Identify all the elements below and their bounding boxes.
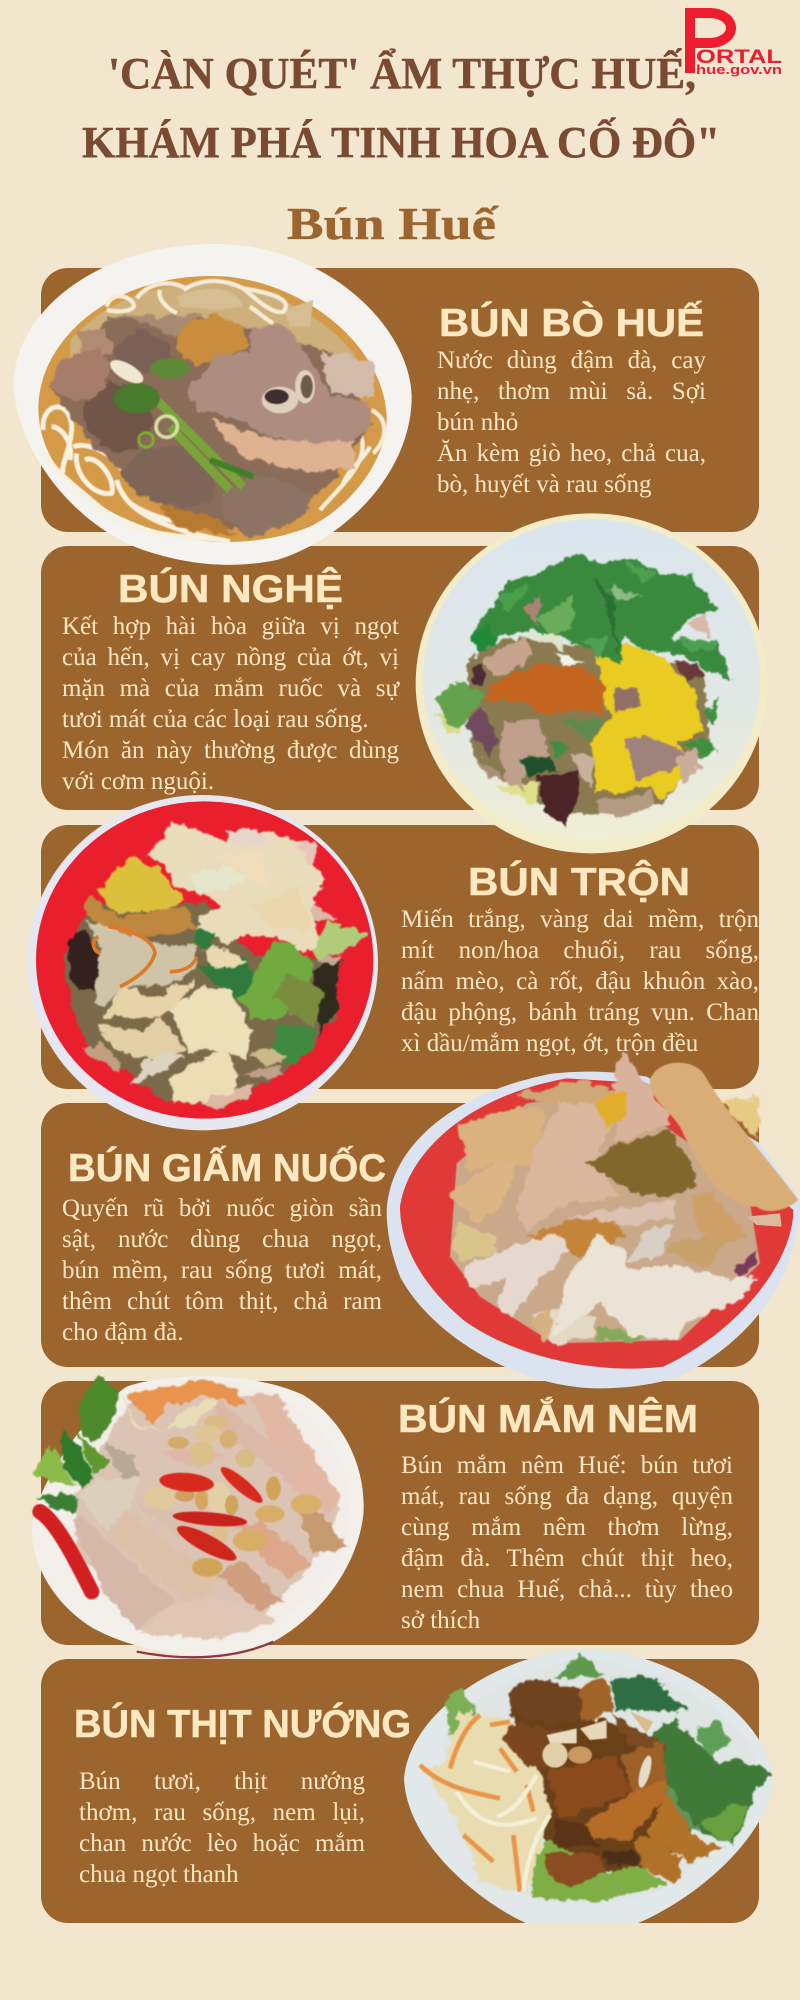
description: Bún trộn: xì dầu/mắm ngọt, ớt, trộn đều [401, 1030, 698, 1057]
description: Bún bò Huế [437, 347, 706, 498]
icon: bowl of bún trộn [27, 795, 378, 1130]
description: Bún mắm nêm: mát, rau sống đa dạng, quyện [401, 1483, 733, 1510]
description: Bún mắm nêm: cùng mắm nêm thơm lừng, [401, 1514, 733, 1541]
description: Bún trộn: mít non/hoa chuối, rau sống, [401, 937, 759, 964]
description: Bún giấm nuốc: bún mềm, rau sống tươi mát, [62, 1257, 382, 1284]
description: Bún bò Huế: nhẹ, thơm mùi sả. Sợi [437, 378, 706, 405]
icon: bowl of bún thịt nướng [404, 1649, 774, 1923]
subtitle: Bún Huế: Bún Huế [287, 198, 499, 249]
description: Bún giấm nuốc [62, 1195, 382, 1346]
panel: Bún giấm nuốc [41, 1103, 759, 1367]
heading: Bún trộn: BÚN TRỘN [468, 859, 690, 904]
description: Bún bò Huế: Nước dùng đậm đà, cay [437, 347, 706, 374]
description: Bún mắm nêm: đậm đà. Thêm chút thịt heo, [401, 1545, 733, 1572]
description: Bún nghệ: với cơm nguội. [62, 768, 214, 795]
description: Bún mắm nêm: sở thích [401, 1607, 480, 1634]
description: Bún nghệ [62, 613, 400, 795]
title: 'CÀN QUÉT' ẨM THỰC HUẾ, [108, 47, 696, 98]
description: Bún giấm nuốc: Quyến rũ bởi nuốc giòn sần [62, 1195, 382, 1222]
description: Bún trộn: đậu phộng, bánh tráng vụn. Chan [401, 999, 759, 1026]
panel: Bún trộn [41, 825, 759, 1089]
title [82, 47, 720, 167]
description: Bún thịt nướng [79, 1768, 365, 1888]
description: Bún nghệ: mặn mà của mắm ruốc và sự [62, 675, 399, 702]
panel: Bún nghệ [41, 546, 759, 810]
icon: bowl of bún nghệ [416, 513, 760, 854]
description: Bún nghệ: của hến, vị cay nồng của ớt, vị [62, 644, 399, 671]
title: KHÁM PHÁ TINH HOA CỐ ĐÔ" [82, 117, 720, 167]
panel: Bún bò Huế [41, 268, 759, 532]
description: Bún trộn: nấm mèo, cà rốt, đậu khuôn xào, [401, 968, 759, 995]
description: Bún nghệ: tươi mát của các loại rau sống. [62, 706, 369, 733]
description: Bún mắm nêm: nem chua Huế, chả... tùy theo [401, 1576, 733, 1603]
heading: Bún nghệ: BÚN NGHỆ [118, 567, 343, 611]
description: Bún thịt nướng: chua ngọt thanh [79, 1861, 239, 1888]
description: Bún nghệ: Kết hợp hài hòa giữa vị ngọt [62, 613, 399, 640]
description: Bún bò Huế: Ăn kèm giò heo, chả cua, [437, 440, 706, 467]
description: Bún mắm nêm [401, 1452, 733, 1634]
heading: Bún bò Huế: BÚN BÒ HUẾ [439, 301, 704, 345]
panel: Bún thịt nướng [41, 1659, 759, 1923]
heading: Bún giấm nuốc: BÚN GIẤM NUỐC [68, 1145, 386, 1190]
description: Bún trộn: Miến trắng, vàng dai mềm, trộn [401, 906, 759, 933]
description: Bún thịt nướng: chan nước lèo hoặc mắm [79, 1830, 365, 1857]
logo: Portal hue.gov.vn: hue.gov.vn [696, 62, 782, 77]
icon: bowl of bún giấm nuốc [386, 1050, 800, 1388]
description: Bún thịt nướng: thơm, rau sống, nem lụi, [79, 1799, 365, 1826]
heading: Bún thịt nướng: BÚN THỊT NƯỚNG [74, 1702, 411, 1746]
description: Bún giấm nuốc: sật, nước dùng chua ngọt, [62, 1226, 382, 1253]
description: Bún giấm nuốc: thêm chút tôm thịt, chả ram [62, 1288, 382, 1315]
description: Bún bò Huế: bún nhỏ [437, 409, 518, 436]
logo: Portal hue.gov.vn: ORTAL [696, 47, 783, 68]
description: Bún giấm nuốc: cho đậm đà. [62, 1319, 183, 1346]
icon: bowl of bún bò Huế [13, 244, 750, 850]
description: Bún nghệ: Món ăn này thường được dùng [62, 737, 399, 764]
logo: Portal hue.gov.vn [685, 8, 783, 77]
description: Bún thịt nướng: Bún tươi, thịt nướng [79, 1768, 365, 1795]
panel: Bún mắm nêm [41, 1381, 759, 1645]
description: Bún trộn [401, 906, 759, 1057]
description: Bún mắm nêm: Bún mắm nêm Huế: bún tươi [401, 1452, 733, 1479]
icon: bowl of bún mắm nêm [32, 1374, 364, 1658]
heading: Bún mắm nêm: BÚN MẮM NÊM [398, 1397, 698, 1441]
description: Bún bò Huế: bò, huyết và rau sống [437, 471, 652, 498]
